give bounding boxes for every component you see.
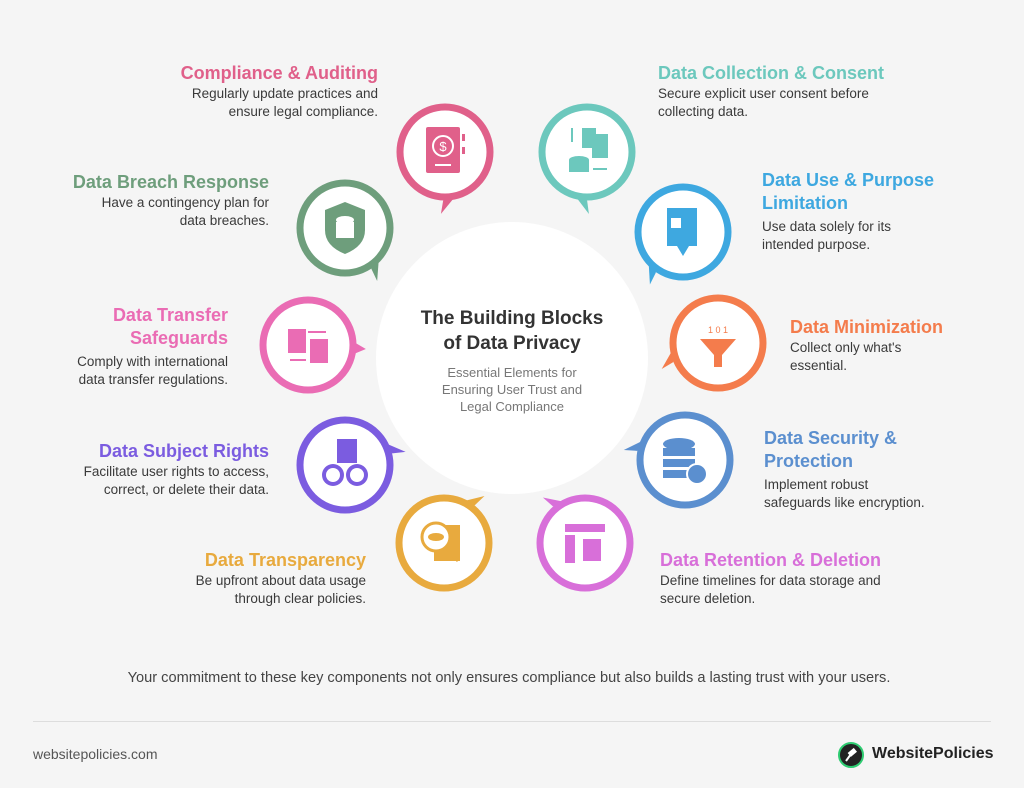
text: rights: Data Subject Rights <box>99 441 269 461</box>
text: data use: Limitation <box>762 193 848 213</box>
logo <box>838 742 994 768</box>
text: minimization: Data Minimization <box>790 317 943 337</box>
text: transfer: data transfer regulations. <box>79 372 228 387</box>
text: minimization <box>790 317 943 373</box>
text: compliance <box>181 63 378 119</box>
center title <box>420 308 603 414</box>
text: transparency: Data Transparency <box>205 550 366 570</box>
text: data use: Data Use & Purpose <box>762 170 934 190</box>
center title: Legal Compliance <box>460 399 564 414</box>
icon: collection <box>542 107 632 214</box>
text: retention: secure deletion. <box>660 591 755 606</box>
icon: retention <box>540 488 630 588</box>
center title: Essential Elements for <box>447 365 577 380</box>
icon: compliance: $ <box>439 139 447 154</box>
icon: transparency <box>399 488 489 588</box>
icon: compliance <box>400 107 490 214</box>
center title: Ensuring User Trust and <box>442 382 582 397</box>
icon: data use <box>635 187 728 284</box>
text: retention: Data Retention & Deletion <box>660 550 881 570</box>
text: transfer: Safeguards <box>130 328 228 348</box>
text: compliance: Regularly update practices and <box>192 86 378 101</box>
text: compliance: Compliance & Auditing <box>181 63 378 83</box>
text: breach <box>73 172 269 228</box>
text: security <box>764 428 925 510</box>
text: collection: Secure explicit user consent before <box>658 86 869 101</box>
text: collection: collecting data. <box>658 104 748 119</box>
text: transfer: Data Transfer <box>113 305 228 325</box>
text: transfer <box>77 305 228 387</box>
text: collection <box>658 63 884 119</box>
center circle <box>376 222 648 494</box>
text: rights <box>84 441 269 497</box>
text: retention: Define timelines for data storage and <box>660 573 881 588</box>
text: breach: Data Breach Response <box>73 172 269 192</box>
icon: security <box>624 415 730 505</box>
footer note: Your commitment to these key components not only ensures compliance but also builds a lasting trust with your users. <box>128 670 890 686</box>
text: rights: correct, or delete their data. <box>104 482 269 497</box>
center title: The Building Blocks <box>421 308 603 329</box>
logo: WebsitePolicies <box>872 745 994 762</box>
icon: transfer <box>263 300 366 390</box>
footer url: websitepolicies.com <box>33 746 158 762</box>
text: minimization: Collect only what's <box>790 340 901 355</box>
text: security: Protection <box>764 451 853 471</box>
text: transfer: Comply with international <box>77 354 228 369</box>
text: transparency <box>196 550 366 606</box>
text: breach: Have a contingency plan for <box>102 195 269 210</box>
text: compliance: ensure legal compliance. <box>229 104 378 119</box>
icon: minimization: 1 0 1 <box>708 325 728 335</box>
text: security: safeguards like encryption. <box>764 495 925 510</box>
text: security: Implement robust <box>764 477 868 492</box>
icon: minimization <box>660 298 763 388</box>
text: data use <box>762 170 934 252</box>
text: minimization: essential. <box>790 358 847 373</box>
icon: subject rights <box>300 420 406 510</box>
center title: of Data Privacy <box>443 333 581 354</box>
text: rights: Facilitate user rights to access, <box>84 464 269 479</box>
text: retention <box>660 550 881 606</box>
text: breach: data breaches. <box>180 213 269 228</box>
text: security: Data Security & <box>764 428 897 448</box>
text: transparency: through clear policies. <box>235 591 366 606</box>
text: collection: Data Collection & Consent <box>658 63 884 83</box>
text: transparency: Be upfront about data usage <box>196 573 366 588</box>
text: data use: intended purpose. <box>762 237 870 252</box>
text: data use: Use data solely for its <box>762 219 891 234</box>
icon: breach <box>300 183 392 281</box>
